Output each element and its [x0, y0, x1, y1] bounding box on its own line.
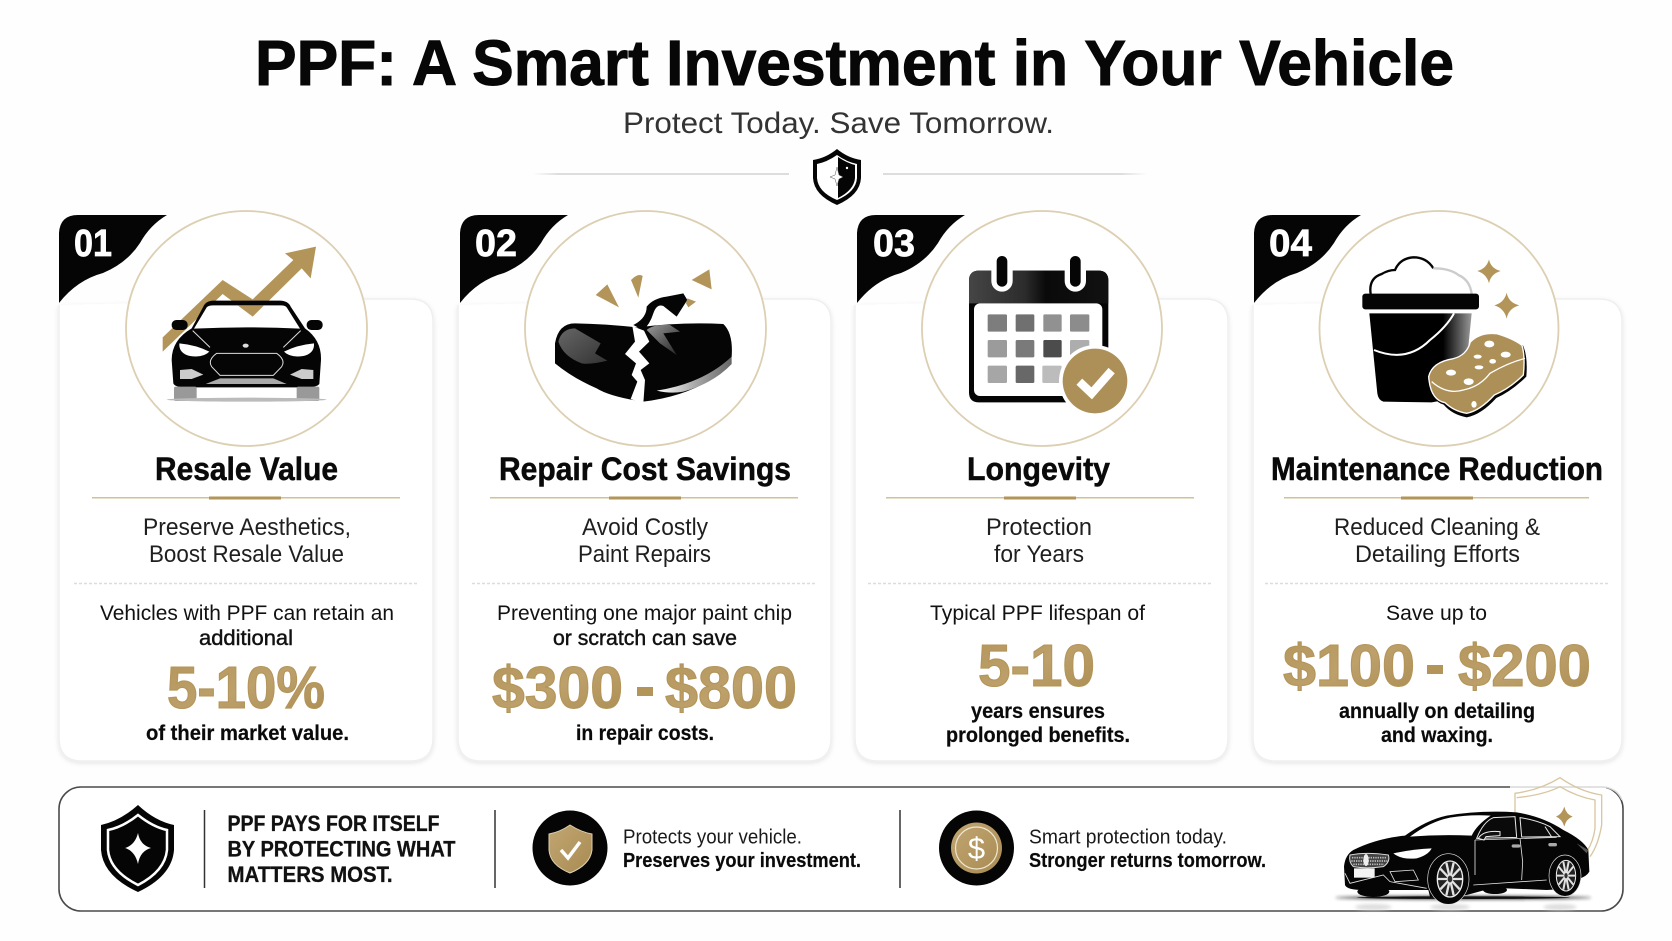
detail text: [100, 602, 394, 650]
subheading: Detailing Efforts: [1355, 541, 1520, 568]
callout: stronger returns: Smart protection today.: [1029, 826, 1227, 848]
icon circle: [525, 211, 766, 446]
number badge: [59, 215, 167, 303]
stat caption: of their market value.: [146, 722, 349, 745]
icon: gold shield check: [532, 810, 608, 886]
icon: small shield: [813, 149, 861, 205]
subheading: [1334, 514, 1540, 568]
number badge: 03: [873, 223, 915, 265]
stat: $300: [492, 655, 623, 721]
gold rule: [1284, 496, 1589, 500]
icon: black sedan: [1335, 812, 1592, 910]
subheading: for Years: [994, 541, 1084, 568]
subheading: Paint Repairs: [578, 541, 711, 568]
stat: [1283, 633, 1591, 699]
icon: bucket and sponge: [1362, 257, 1527, 417]
stat caption: years ensures: [971, 700, 1105, 723]
stat caption: annually on detailing: [1339, 700, 1535, 723]
callout: preserves investment: Protects your vehicle.: [623, 826, 802, 848]
callout: pays for itself: PPF PAYS FOR ITSELF: [228, 811, 440, 836]
number badge: [857, 215, 965, 303]
number badge: 01: [74, 223, 112, 265]
number badge: [460, 215, 568, 303]
icon circle: [126, 211, 367, 446]
card background: [59, 299, 433, 761]
card background: [1253, 299, 1622, 761]
car ground shadow: [1335, 896, 1592, 910]
stat: 5-10%: [167, 655, 325, 721]
stat caption: and waxing.: [1381, 724, 1493, 747]
card background: [855, 299, 1228, 761]
callout: pays for itself: MATTERS MOST.: [228, 862, 392, 887]
icon: black shield with star: [101, 805, 174, 892]
stat: $200: [1458, 633, 1591, 699]
number badge: [1254, 215, 1361, 303]
icon circle: [922, 211, 1162, 446]
callout: stronger returns: [1029, 826, 1266, 872]
subheading: [143, 514, 351, 568]
subheading: Preserve Aesthetics,: [143, 514, 351, 541]
stat caption: [1339, 700, 1535, 747]
panel: bottom summary banner: [59, 778, 1623, 911]
gold rule: [886, 496, 1194, 500]
callout: pays for itself: [228, 811, 456, 887]
gold rule: [92, 496, 400, 500]
detail text: [497, 602, 792, 650]
icon: calendar with check: [969, 250, 1131, 417]
callout: preserves investment: Preserves your investment.: [623, 850, 861, 872]
header divider with shield: [533, 149, 1147, 205]
heading: Maintenance Reduction: [1271, 451, 1603, 487]
icon: gold outline shield: [1515, 778, 1602, 857]
stat: [492, 655, 797, 721]
detail text: or scratch can save: [553, 627, 737, 650]
card background: [458, 299, 831, 761]
subtitle: Protect Today. Save Tomorrow.: [623, 107, 1054, 140]
stat: 5-10: [978, 633, 1095, 699]
heading: Resale Value: [155, 451, 338, 487]
heading: Longevity: [967, 451, 1110, 487]
panel: repair cost savings: [458, 211, 831, 761]
number badge: 04: [1269, 223, 1312, 265]
detail text: Typical PPF lifespan of: [930, 602, 1145, 625]
detail text: additional: [199, 627, 293, 650]
icon: cracked paint chip: [555, 269, 732, 403]
subheading: [578, 514, 711, 568]
subheading: [986, 514, 1092, 568]
title: PPF: A Smart Investment in Your Vehicle: [255, 27, 1454, 99]
detail text: Save up to: [1386, 602, 1487, 625]
callout: pays for itself: BY PROTECTING WHAT: [228, 836, 456, 862]
banner outline: [59, 787, 1623, 911]
icon: dollar coin: $: [968, 831, 985, 866]
stat caption: [946, 700, 1130, 747]
detail text: Vehicles with PPF can retain an: [100, 602, 394, 625]
subheading: Protection: [986, 514, 1092, 541]
icon circle: [1320, 211, 1558, 446]
stat caption: prolonged benefits.: [946, 724, 1130, 747]
panel: longevity: [855, 211, 1228, 761]
callout: preserves investment: [623, 826, 861, 872]
subheading: Boost Resale Value: [149, 541, 344, 568]
gold rule: [490, 496, 798, 500]
front wheel: [1428, 854, 1469, 904]
stat: $100: [1283, 633, 1415, 699]
panel: maintenance reduction: [1253, 211, 1622, 761]
stat: $800: [665, 655, 797, 721]
icon: car with rising arrow: [163, 247, 327, 402]
heading: Repair Cost Savings: [499, 451, 791, 487]
stat caption: in repair costs.: [576, 722, 714, 745]
rear wheel: [1549, 855, 1581, 896]
icon: dollar coin: [939, 810, 1014, 886]
subheading: Reduced Cleaning &: [1334, 514, 1540, 541]
subheading: Avoid Costly: [582, 514, 708, 541]
panel: resale value: [59, 211, 433, 761]
detail text: Preventing one major paint chip: [497, 602, 792, 625]
number badge: 02: [475, 223, 517, 265]
callout: stronger returns: Stronger returns tomorrow.: [1029, 850, 1266, 872]
